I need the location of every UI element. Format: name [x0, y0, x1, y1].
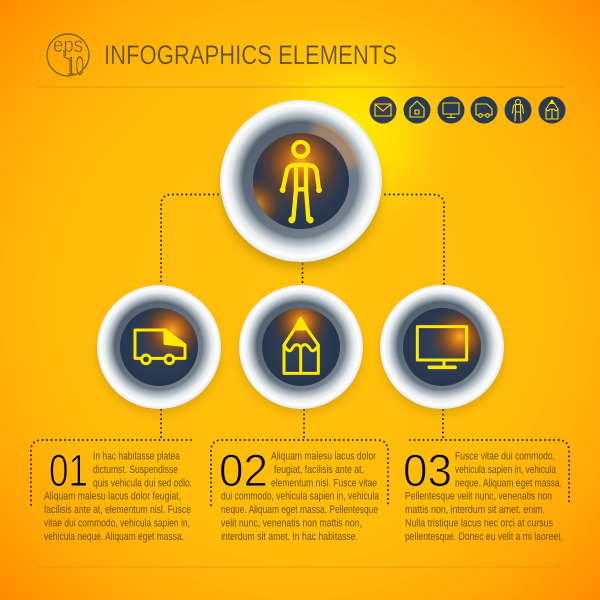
text block 01	[44, 450, 192, 543]
number 03: 03	[403, 445, 452, 496]
frame 02	[211, 440, 388, 505]
text block 03: vehicula sapien in, vehicula	[455, 464, 556, 476]
text block 02: interdum sit amet. In hac habitasse.	[221, 531, 358, 543]
text block 01: dictumst. Suspendisse	[93, 464, 178, 476]
frame 01	[31, 440, 191, 505]
text block 02: velit nunc, venenatis non mattis non,	[221, 517, 362, 529]
text block 02: feugiat, facilisis ante at,	[274, 464, 364, 476]
header divider	[35, 86, 565, 88]
text block 02: elementum nisl. Fusce vitae	[271, 477, 377, 489]
connectors	[161, 194, 444, 439]
text block 01: quis vehicula dui sed odio.	[93, 477, 192, 489]
text block 02: dui commodo, vehicula sapien in, vehicula	[221, 491, 379, 503]
logo: eps 10 badge: 10	[67, 51, 84, 81]
icon: person	[504, 96, 532, 124]
text block 03: Fusce vitae dui commodo,	[455, 450, 555, 462]
node: monitor circle	[380, 285, 504, 413]
text block 02: Aliquam malesu lacus dolor	[271, 450, 376, 462]
footer divider	[35, 566, 565, 568]
number 02: 02	[219, 445, 268, 496]
icon row	[370, 96, 566, 124]
text block 01: vehicula neque. Aliquam eget massa.	[44, 531, 184, 543]
number 01: 01	[49, 445, 88, 496]
icon: pencil large	[284, 318, 318, 373]
text block 02: neque. Aliquam eget massa. Pellentesque	[221, 504, 378, 516]
text block 03: pellentesque. Donec eu velit a mi laoreet.	[405, 531, 563, 543]
icon: monitor large	[417, 327, 467, 367]
logo: eps 10 badge	[47, 34, 89, 81]
text block 03: neque. Aliquam eget massa.	[455, 477, 562, 489]
title: INFOGRAPHICS ELEMENTS	[104, 40, 397, 70]
text block 03	[405, 450, 563, 543]
icon: person large	[280, 142, 322, 223]
icon: pencil	[538, 96, 566, 124]
icon: monitor	[438, 96, 464, 124]
text block 01: vitae dui commodo, vehicula sapien in,	[44, 517, 190, 529]
logo: eps 10 badge: eps	[53, 34, 83, 57]
text block 02	[221, 450, 379, 543]
icon: mail	[370, 96, 396, 124]
node: truck circle	[97, 285, 221, 413]
text block 03: Nulla tristique lacus nec orci at cursus	[405, 517, 553, 529]
panel: step 01	[31, 440, 192, 543]
frame 03	[410, 440, 569, 505]
icon: truck large	[135, 330, 185, 364]
text block 01: facilisis ante at, elementum nisl. Fusce	[44, 504, 191, 516]
icon: truck	[470, 96, 498, 124]
text block 03: mattis non, interdum sit amet, enim.	[405, 504, 545, 516]
text block 01: Aliquam malesu lacus dolor feugiat,	[44, 491, 181, 503]
hub: person circle	[220, 100, 382, 268]
text block 01: In hac habitasse platea	[93, 450, 180, 462]
icon: house	[404, 96, 430, 124]
node: pencil circle	[239, 285, 363, 413]
panel: step 03	[403, 440, 569, 543]
text block 03: Pellentesque velit nunc, venenatis non	[405, 491, 552, 503]
panel: step 02	[211, 440, 388, 543]
